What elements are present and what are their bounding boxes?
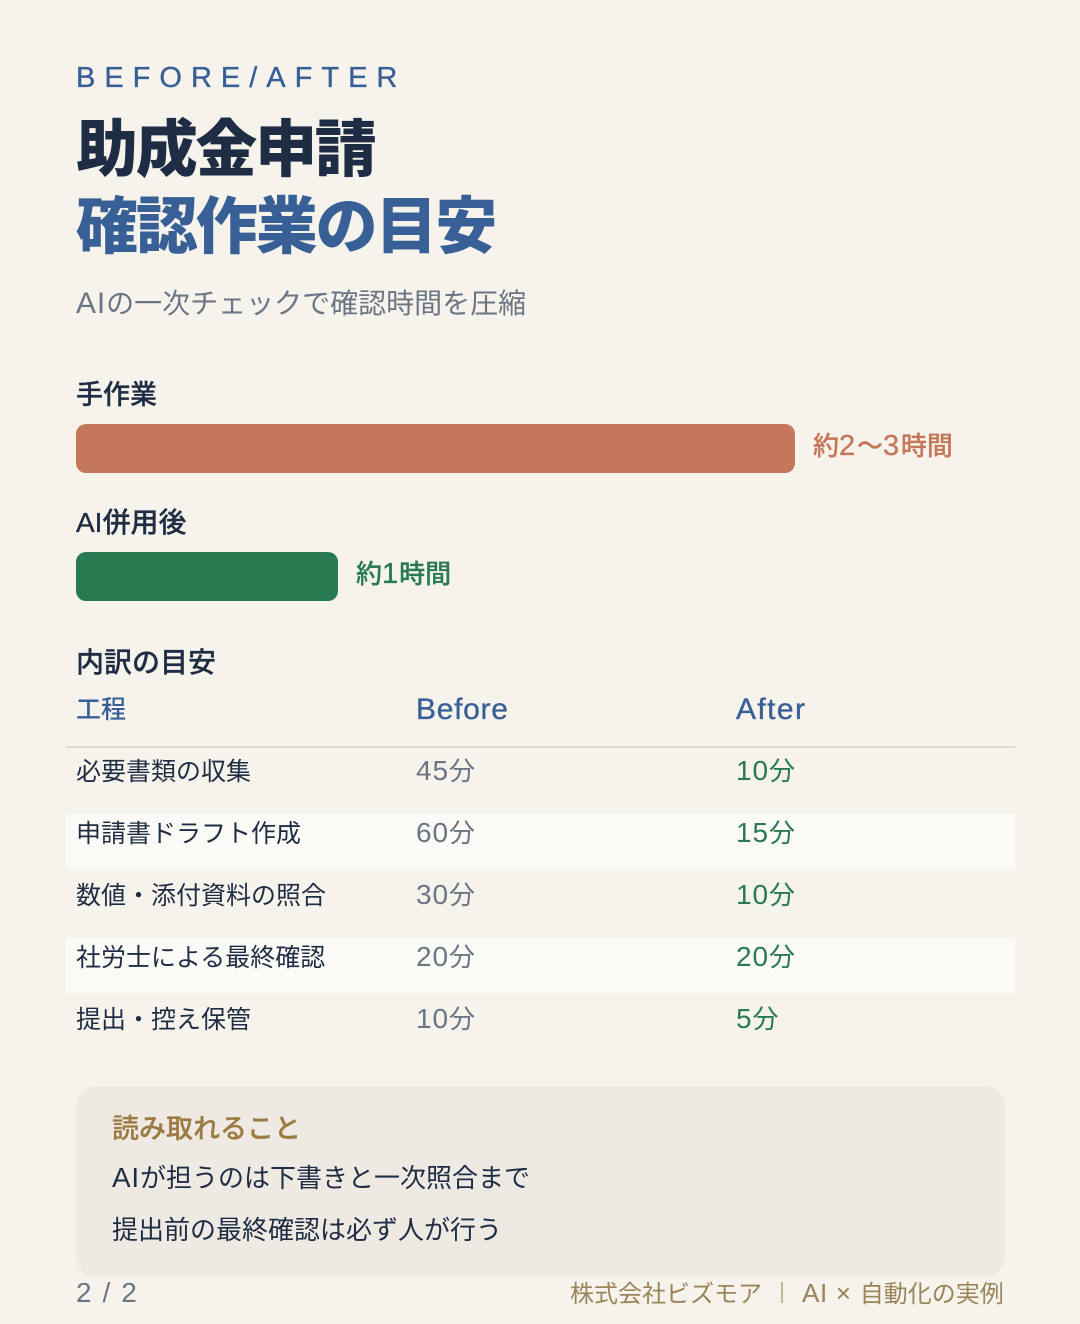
- row 3: [76, 875, 795, 912]
- row 4: 20分: [416, 937, 475, 974]
- label: manual work: 手作業: [76, 373, 157, 412]
- header row: Before: [416, 693, 509, 726]
- header row: [66, 694, 1015, 748]
- label: with AI: AI併用後: [76, 501, 186, 541]
- row 1: [76, 751, 795, 788]
- row 1: 45分: [416, 751, 475, 788]
- row 3: 10分: [736, 875, 795, 912]
- row 4: [76, 937, 795, 974]
- bar: with AI: [76, 552, 338, 601]
- footer credit: [570, 1274, 1004, 1309]
- title line 1: 助成金申請: [76, 99, 375, 189]
- row 5: 提出・控え保管: [76, 1000, 251, 1036]
- row band 4: [66, 938, 1015, 993]
- value: with AI: 約1時間: [356, 554, 451, 591]
- row 3: 30分: [416, 875, 475, 912]
- bar: manual work: [76, 424, 795, 473]
- panel: breakdown table: [66, 641, 1015, 1036]
- row 2: 申請書ドラフト作成: [76, 814, 301, 850]
- row 3: 数値・添付資料の照合: [76, 876, 326, 912]
- page number: 2 / 2: [76, 1277, 138, 1308]
- row 2: 15分: [736, 813, 795, 850]
- panel: comparison bars: [76, 373, 953, 601]
- series name: AI × 自動化の実例: [802, 1274, 1004, 1309]
- title: [76, 99, 495, 266]
- row 2: 60分: [416, 813, 475, 850]
- callout line 1: AIが担うのは下書きと一次照合まで: [112, 1158, 530, 1195]
- company name: 株式会社ビズモア: [570, 1274, 762, 1309]
- row 2: [76, 813, 795, 850]
- callout: takeaways: [76, 1086, 1005, 1277]
- row 5: 5分: [736, 999, 778, 1036]
- value: manual work: 約2〜3時間: [813, 426, 953, 463]
- row 4: 20分: [736, 937, 795, 974]
- row 1: 10分: [736, 751, 795, 788]
- row 4: 社労士による最終確認: [76, 938, 325, 974]
- header row: After: [736, 693, 806, 726]
- header row: 工程: [76, 690, 126, 726]
- callout line 2: 提出前の最終確認は必ず人が行う: [112, 1210, 502, 1247]
- row band 2: [66, 814, 1015, 869]
- callout heading: 読み取れること: [112, 1107, 301, 1146]
- row 1: 必要書類の収集: [76, 752, 251, 788]
- table heading: 内訳の目安: [76, 641, 216, 681]
- eyebrow label: BEFORE/AFTER: [76, 62, 406, 94]
- row 5: 10分: [416, 999, 475, 1036]
- row 5: [76, 999, 778, 1036]
- subtitle: AIの一次チェックで確認時間を圧縮: [76, 282, 526, 322]
- title line 2: 確認作業の目安: [76, 176, 495, 266]
- separator: [781, 1282, 782, 1303]
